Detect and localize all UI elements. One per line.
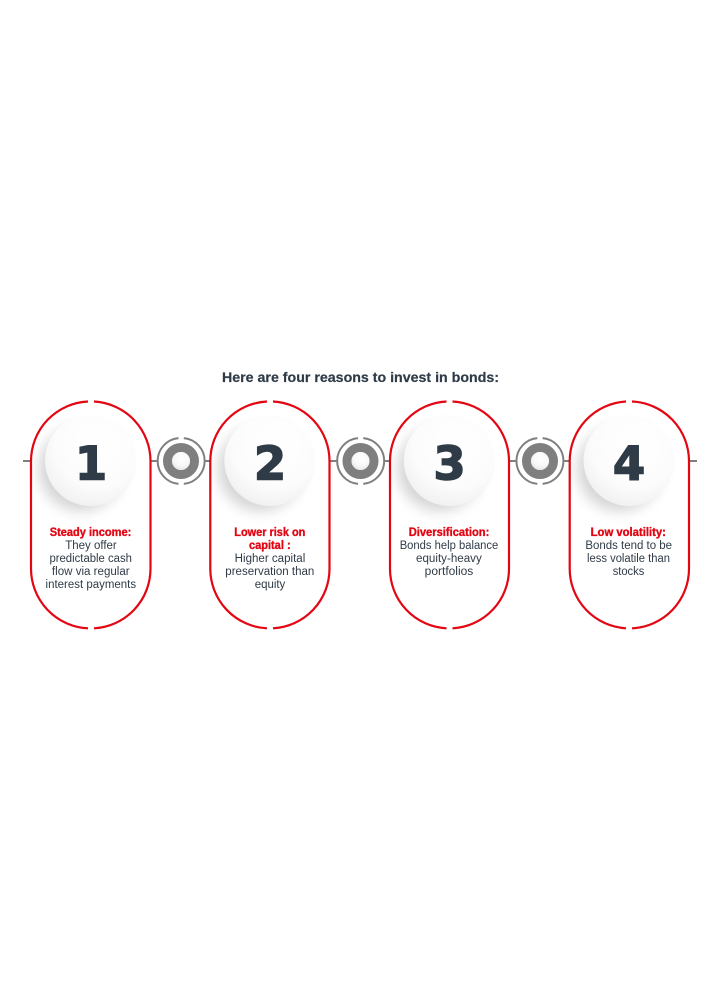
shadow 1	[39, 427, 123, 511]
number ball 4	[584, 415, 674, 506]
number ball 2	[224, 415, 315, 506]
text: steady income	[46, 527, 136, 591]
text: low volatility	[585, 527, 672, 578]
text: steady income: Steady income:	[50, 527, 131, 539]
text: low volatility: Bonds tend to be	[585, 540, 672, 552]
text: lower risk: capital :	[249, 540, 291, 552]
shadow 4	[578, 427, 662, 511]
text: steady income: predictable cash	[49, 553, 132, 565]
text: diversification: Bonds help balance	[400, 540, 498, 552]
number ball 1	[45, 415, 136, 506]
text: low volatility: Low volatility:	[591, 527, 666, 539]
text: diversification: Diversification:	[409, 527, 489, 539]
number 4: 4	[613, 436, 645, 490]
title: Here are four reasons to invest in bonds:	[222, 370, 499, 385]
panel: reason 2	[210, 402, 330, 628]
icon: connector ring 2	[337, 438, 384, 484]
panel: reason 4	[570, 402, 689, 628]
panel: reason 1	[31, 402, 151, 628]
number ball 3	[404, 415, 495, 506]
number 1: 1	[75, 436, 107, 490]
text: lower risk	[225, 527, 314, 591]
text: lower risk: equity	[255, 579, 286, 591]
number 3: 3	[433, 436, 466, 490]
text: low volatility: stocks	[613, 566, 645, 578]
number 2: 2	[254, 436, 286, 490]
text: lower risk: Lower risk on	[234, 527, 305, 539]
text: steady income: They offer	[65, 540, 117, 552]
pill outline 3	[390, 402, 509, 628]
shadow 3	[398, 427, 482, 511]
text: diversification: equity-heavy	[416, 553, 482, 565]
text: lower risk: Higher capital	[235, 553, 305, 565]
pill outline 2	[210, 402, 330, 628]
text: diversification: portfolios	[425, 566, 474, 578]
shadow 2	[218, 427, 302, 511]
text: steady income: flow via regular	[52, 566, 130, 578]
text: lower risk: preservation than	[225, 566, 314, 578]
panel: reason 3	[390, 402, 509, 628]
icon: connector ring 3	[516, 438, 563, 484]
icon: connector ring 1	[158, 438, 205, 484]
connector lines	[23, 460, 697, 462]
text: steady income: interest payments	[46, 579, 136, 591]
pill outline 1	[31, 402, 151, 628]
text: diversification	[400, 527, 498, 578]
pill outline 4	[570, 402, 689, 628]
text: low volatility: less volatile than	[587, 553, 670, 565]
